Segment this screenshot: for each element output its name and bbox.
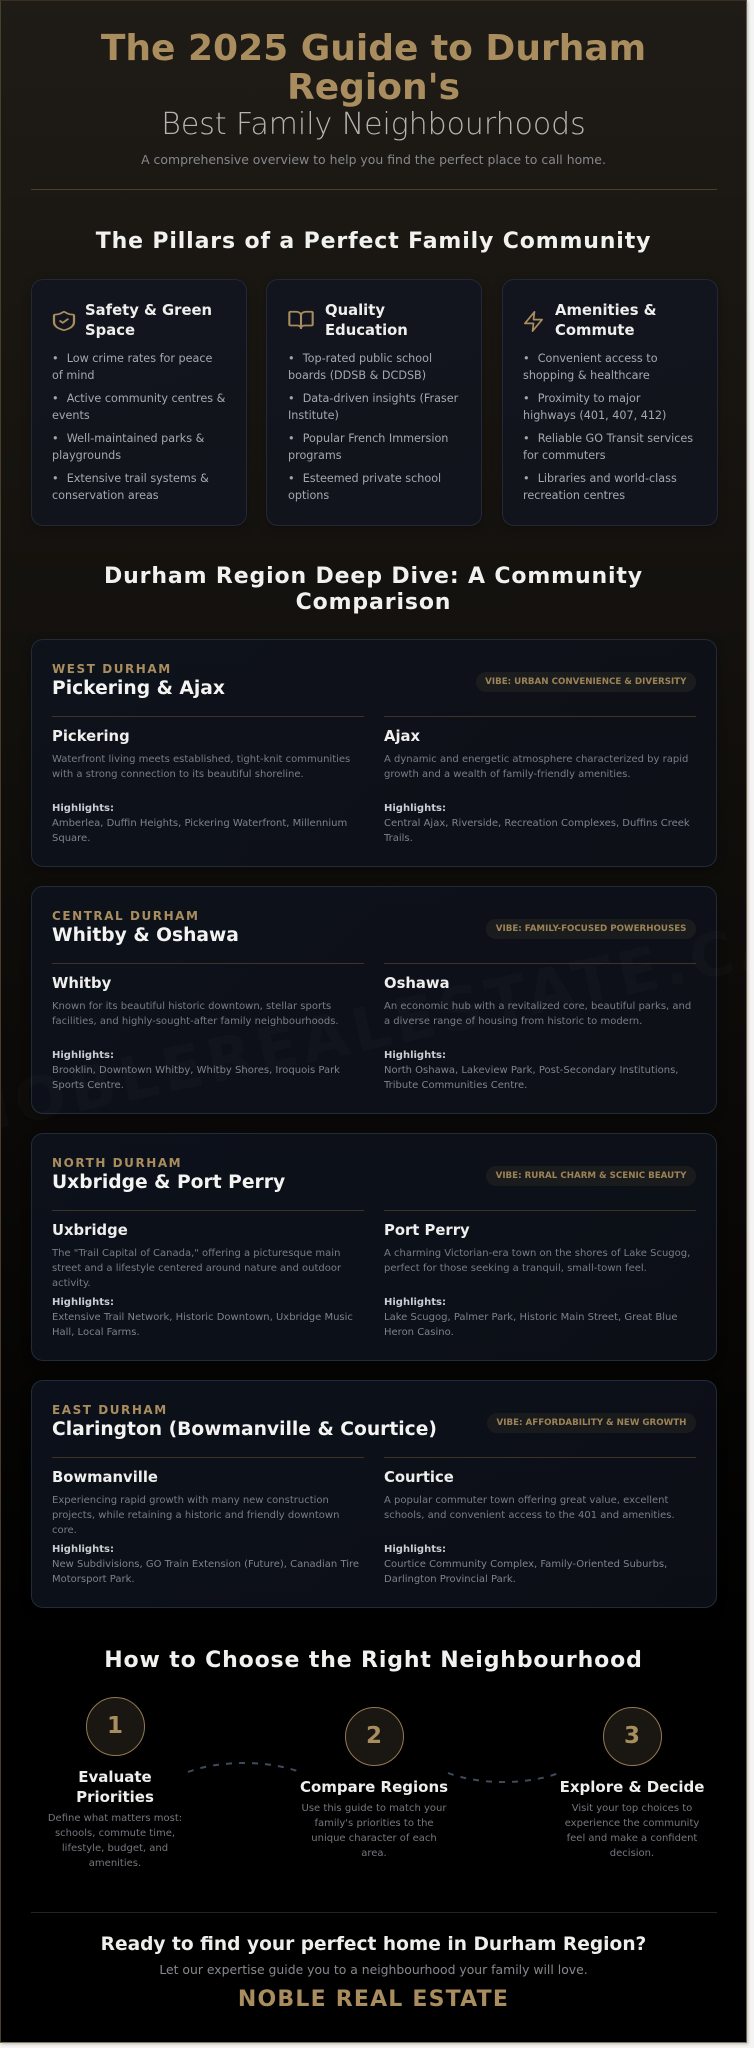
step number: 2 <box>366 1723 382 1749</box>
community highlights: Highlights: <box>52 1297 114 1308</box>
step 1: evaluate priorities <box>48 1697 182 1869</box>
bullet list: Reliable GO Transit services <box>538 432 693 445</box>
community highlights: Amberlea, Duffin Heights, Pickering Waterfront, Millennium <box>52 818 347 829</box>
panel: central durham <box>31 886 717 1114</box>
community highlights: Motorsport Park. <box>52 1574 135 1585</box>
brand name: NOBLE REAL ESTATE <box>238 1987 509 2012</box>
bullet list: Extensive trail systems & <box>67 472 209 485</box>
section heading: how to choose: How to Choose the Right Neighbourhood <box>104 1648 643 1672</box>
region label: EAST DURHAM <box>52 1403 168 1417</box>
arrow: dashed connector from step 2 to step 3 <box>448 1772 556 1783</box>
region name: Pickering & Ajax <box>52 678 225 699</box>
community highlights: Central Ajax, Riverside, Recreation Complexes, Duffins Creek <box>384 818 690 829</box>
header title: The 2025 Guide to Durham <box>101 28 646 69</box>
bullet list: options <box>288 489 329 502</box>
community highlights: Courtice Community Complex, Family-Oriented Suburbs, <box>384 1559 667 1570</box>
community: Port Perry <box>384 1210 696 1350</box>
community highlights <box>52 803 347 844</box>
bullet list: Well-maintained parks & <box>67 432 204 445</box>
bullet list: • <box>523 392 530 405</box>
community: Oshawa <box>384 963 696 1103</box>
region name: Whitby & Oshawa <box>52 925 239 946</box>
vibe badge <box>486 919 696 939</box>
step number: 3 <box>624 1723 640 1749</box>
community highlights: Highlights: <box>52 1050 114 1061</box>
bullet list: • <box>288 472 295 485</box>
community name: Bowmanville <box>52 1469 158 1486</box>
community description <box>52 754 350 780</box>
footer call to action: Ready to find your perfect home in Durham Region? <box>101 1934 646 1955</box>
step description <box>302 1803 446 1859</box>
header tagline: A comprehensive overview to help you find the perfect place to call home. <box>141 152 606 167</box>
vibe badge <box>486 1166 696 1186</box>
step description: Use this guide to match your <box>302 1803 446 1814</box>
community description: Known for its beautiful historic downtown, stellar sports <box>52 1001 331 1012</box>
community highlights: Hall, Local Farms. <box>52 1327 140 1338</box>
bullet list: • <box>52 352 59 365</box>
bullet list: boards (DDSB & DCDSB) <box>288 369 426 382</box>
panel heading: Education <box>325 322 408 339</box>
community name: Courtice <box>384 1469 454 1486</box>
icon: shield <box>52 311 76 331</box>
community highlights: New Subdivisions, GO Train Extension (Future), Canadian Tire <box>52 1559 359 1570</box>
vibe badge: VIBE: AFFORDABILITY & NEW GROWTH <box>497 1418 686 1428</box>
community highlights <box>384 1050 678 1091</box>
community description: schools, and convenient access to the 401 and amenities. <box>384 1510 675 1521</box>
step description: area. <box>361 1848 387 1859</box>
bullet list: • <box>52 472 59 485</box>
community description: A charming Victorian-era town on the shores of Lake Scugog, <box>384 1248 690 1259</box>
step description: feel and make a confident <box>567 1833 697 1844</box>
section heading: community comparison: Comparison <box>296 590 451 615</box>
footer supporting text: Let our expertise guide you to a neighbourhood your family will love. <box>159 1962 588 1977</box>
bullet list <box>288 352 458 502</box>
community highlights: Heron Casino. <box>384 1327 454 1338</box>
vibe badge: VIBE: URBAN CONVENIENCE & DIVERSITY <box>485 677 686 687</box>
community highlights <box>52 1050 340 1091</box>
community description: A popular commuter town offering great value, excellent <box>384 1495 668 1506</box>
panel heading: Commute <box>555 322 635 339</box>
step number <box>602 1707 662 1766</box>
community description: projects, while retaining a historic and friendly downtown <box>52 1510 339 1521</box>
community highlights: Highlights: <box>384 1050 446 1061</box>
community description <box>384 1248 690 1274</box>
panel: amenities and commute <box>502 279 718 526</box>
vibe badge: VIBE: FAMILY-FOCUSED POWERHOUSES <box>496 924 686 934</box>
step description: unique character of each <box>311 1833 437 1844</box>
community description <box>52 1495 339 1536</box>
bullet list: Convenient access to <box>538 352 658 365</box>
panel heading: Space <box>85 322 135 339</box>
region label: WEST DURHAM <box>52 662 172 676</box>
community highlights: Square. <box>52 833 90 844</box>
panel: east durham <box>31 1380 717 1608</box>
bullet list: playgrounds <box>52 449 121 462</box>
community: Bowmanville <box>52 1457 364 1597</box>
community description <box>384 1495 675 1521</box>
panel heading: Quality <box>325 302 385 319</box>
community highlights: North Oshawa, Lakeview Park, Post-Secondary Institutions, <box>384 1065 678 1076</box>
community description <box>52 1248 342 1289</box>
community name: Port Perry <box>384 1222 470 1239</box>
step number <box>86 1697 144 1756</box>
step description <box>48 1813 182 1869</box>
step description: family's priorities to the <box>314 1818 434 1829</box>
step description: experience the community <box>565 1818 699 1829</box>
bullet list: Active community centres & <box>67 392 225 405</box>
step description: amenities. <box>89 1858 141 1869</box>
community description: with a strong connection to its beautiful shoreline. <box>52 769 304 780</box>
community description: facilities, and highly-sought-after family neighbourhoods. <box>52 1016 339 1027</box>
community highlights <box>384 803 690 844</box>
bullet list: • <box>523 352 530 365</box>
step description: decision. <box>610 1848 654 1859</box>
panel heading <box>85 302 212 339</box>
header subtitle: Best Family Neighbourhoods <box>161 107 586 142</box>
bullet list: Popular French Immersion <box>303 432 448 445</box>
community highlights <box>384 1544 667 1585</box>
bullet list: events <box>52 409 90 422</box>
region label: CENTRAL DURHAM <box>52 909 200 923</box>
bullet list: • <box>288 392 295 405</box>
step number: 1 <box>107 1713 123 1739</box>
bullet list: programs <box>288 449 342 462</box>
community highlights <box>384 1297 678 1338</box>
region name: Clarington (Bowmanville & Courtice) <box>52 1419 437 1440</box>
bullet list: • <box>52 392 59 405</box>
community: Ajax <box>384 716 696 856</box>
community: Whitby <box>52 963 364 1103</box>
bullet list <box>52 352 225 502</box>
community highlights: Brooklin, Downtown Whitby, Whitby Shores, Iroquois Park <box>52 1065 340 1076</box>
vibe badge <box>487 1413 696 1433</box>
community highlights: Tribute Communities Centre. <box>384 1080 527 1091</box>
step title: Priorities <box>76 1788 154 1806</box>
community highlights: Highlights: <box>384 1544 446 1555</box>
community description: growth and a wealth of family-friendly amenities. <box>384 769 631 780</box>
bullet list: recreation centres <box>523 489 625 502</box>
community highlights: Trails. <box>384 833 413 844</box>
header title <box>101 28 646 108</box>
bullet list: Top-rated public school <box>303 352 432 365</box>
bullet list: Esteemed private school <box>303 472 441 485</box>
bullet list: for commuters <box>523 449 606 462</box>
bullet list: shopping & healthcare <box>523 369 650 382</box>
community description: The "Trail Capital of Canada," offering a picturesque main <box>52 1248 340 1259</box>
section heading: community comparison <box>104 564 643 615</box>
community highlights: Highlights: <box>52 803 114 814</box>
community name: Oshawa <box>384 975 450 992</box>
step title: Compare Regions <box>300 1778 448 1796</box>
community highlights: Sports Centre. <box>52 1080 124 1091</box>
bullet list: Proximity to major <box>538 392 640 405</box>
vibe badge: VIBE: RURAL CHARM & SCENIC BEAUTY <box>496 1171 686 1181</box>
step 3: explore and decide <box>560 1707 704 1859</box>
community: Courtice <box>384 1457 696 1597</box>
community: Pickering <box>52 716 364 856</box>
panel: west durham <box>31 639 717 867</box>
bullet list: Institute) <box>288 409 339 422</box>
community description: activity. <box>52 1278 91 1289</box>
bullet list: of mind <box>52 369 95 382</box>
bullet list: • <box>523 472 530 485</box>
vibe badge <box>476 672 696 692</box>
bullet list: • <box>288 432 295 445</box>
panel heading <box>555 302 657 339</box>
step title <box>76 1768 154 1806</box>
icon: open book <box>288 310 314 330</box>
panel: quality education <box>266 279 482 526</box>
step title: Evaluate <box>78 1768 152 1786</box>
bullet list: highways (401, 407, 412) <box>523 409 666 422</box>
step number <box>344 1707 404 1766</box>
community highlights: Darlington Provincial Park. <box>384 1574 516 1585</box>
community name: Pickering <box>52 728 130 745</box>
bullet list: conservation areas <box>52 489 159 502</box>
community: Uxbridge <box>52 1210 364 1350</box>
community description: Waterfront living meets established, tight-knit communities <box>52 754 350 765</box>
bullet list: Low crime rates for peace <box>67 352 212 365</box>
arrow: dashed connector from step 1 to step 2 <box>188 1762 297 1773</box>
community description <box>52 1001 339 1027</box>
bullet list: Data-driven insights (Fraser <box>303 392 458 405</box>
panel: north durham <box>31 1133 717 1361</box>
community highlights <box>52 1544 359 1585</box>
panel heading <box>325 302 408 339</box>
icon: lightning bolt <box>524 311 543 332</box>
region label: NORTH DURHAM <box>52 1156 182 1170</box>
region name: Uxbridge & Port Perry <box>52 1172 285 1193</box>
section heading: pillars: The Pillars of a Perfect Family Community <box>96 229 651 254</box>
community highlights: Highlights: <box>52 1544 114 1555</box>
step description: lifestyle, budget, and <box>62 1843 168 1854</box>
step description: Define what matters most: <box>48 1813 182 1824</box>
community description: core. <box>52 1525 77 1536</box>
step 2: compare regions <box>300 1707 448 1859</box>
community highlights: Lake Scugog, Palmer Park, Historic Main Street, Great Blue <box>384 1312 678 1323</box>
community highlights: Highlights: <box>384 803 446 814</box>
bullet list: • <box>52 432 59 445</box>
step description <box>565 1803 699 1859</box>
panel heading: Safety & Green <box>85 302 212 319</box>
step description: Visit your top choices to <box>572 1803 692 1814</box>
community name: Whitby <box>52 975 111 992</box>
bullet list <box>523 352 693 502</box>
community highlights: Extensive Trail Network, Historic Downtown, Uxbridge Music <box>52 1312 353 1323</box>
panel heading: Amenities & <box>555 302 657 319</box>
panel: safety and green space <box>31 279 247 526</box>
community description: street and a lifestyle centered around nature and outdoor <box>52 1263 341 1274</box>
community name: Ajax <box>384 728 420 745</box>
community name: Uxbridge <box>52 1222 128 1239</box>
section heading: community comparison: Durham Region Deep Dive: A Community <box>104 564 643 589</box>
bullet list: • <box>288 352 295 365</box>
community highlights <box>52 1297 353 1338</box>
community description: Experiencing rapid growth with many new construction <box>52 1495 329 1506</box>
bullet list: Libraries and world-class <box>538 472 677 485</box>
community description <box>384 1001 691 1027</box>
community description <box>384 754 688 780</box>
community highlights: Highlights: <box>384 1297 446 1308</box>
step title: Explore & Decide <box>560 1778 704 1796</box>
community description: A dynamic and energetic atmosphere characterized by rapid <box>384 754 688 765</box>
step description: schools, commute time, <box>55 1828 175 1839</box>
community description: An economic hub with a revitalized core, beautiful parks, and <box>384 1001 691 1012</box>
header title: Region's <box>287 67 460 108</box>
bullet list: • <box>523 432 530 445</box>
community description: perfect for those seeking a tranquil, small-town feel. <box>384 1263 647 1274</box>
community description: a diverse range of housing from historic to modern. <box>384 1016 642 1027</box>
